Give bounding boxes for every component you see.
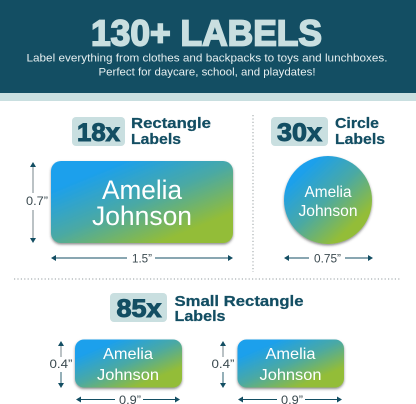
label sample: small rectangle right: Johnson	[260, 367, 322, 384]
subtitle	[26, 52, 388, 78]
label sample: small rectangle left: Amelia	[103, 346, 153, 363]
label sample: circle	[284, 156, 372, 244]
label sample: small rectangle left: Johnson	[97, 367, 159, 384]
height dimension 0.4 left	[50, 341, 72, 388]
width dimension 0.75: 0.75”	[314, 252, 341, 266]
panel: small rectangle labels	[50, 293, 344, 404]
width dimension 0.75	[284, 252, 373, 266]
width dimension 0.9 left	[76, 393, 180, 404]
heading: 30x circle labels: Labels	[335, 131, 385, 148]
width dimension 1.5: 1.5”	[132, 252, 152, 266]
heading: 30x circle labels: Circle	[335, 115, 379, 132]
header banner	[0, 0, 416, 101]
panel: rectangle labels	[26, 115, 233, 266]
label sample: large rectangle: Amelia	[102, 175, 183, 205]
height dimension 0.4 right	[212, 341, 234, 388]
height dimension 0.7: 0.7”	[26, 194, 48, 208]
height dimension 0.4 right: 0.4”	[212, 357, 234, 371]
width dimension 0.9 right	[238, 393, 342, 404]
heading: 85x small rectangle labels: Small Rectangle	[174, 293, 304, 310]
label sample: small rectangle left	[75, 340, 182, 388]
height dimension 0.7	[26, 162, 48, 243]
label sample: large rectangle	[51, 161, 233, 243]
label sample: large rectangle: Johnson	[92, 201, 192, 231]
subtitle: Label everything from clothes and backpacks to toys and lunchboxes.	[26, 52, 388, 64]
title: 130+ LABELS	[91, 12, 322, 54]
heading: 30x circle labels	[271, 115, 385, 148]
heading: 18x rectangle labels: Labels	[131, 131, 181, 148]
label sample: small rectangle right	[238, 340, 344, 388]
heading: 85x small rectangle labels	[110, 293, 304, 325]
heading: 18x rectangle labels	[72, 115, 211, 148]
label sample: small rectangle right: Amelia	[266, 346, 316, 363]
height dimension 0.4 left: 0.4”	[50, 357, 72, 371]
heading: 18x rectangle labels: 18x	[77, 119, 120, 147]
panel: circle labels	[271, 115, 385, 266]
width dimension 1.5	[51, 252, 233, 266]
heading: 18x rectangle labels: Rectangle	[131, 115, 211, 132]
heading: 85x small rectangle labels: 85x	[116, 295, 162, 323]
subtitle: Perfect for daycare, school, and playdates!	[98, 66, 316, 78]
label sample: circle: Amelia	[304, 184, 352, 201]
heading: 30x circle labels: 30x	[277, 119, 322, 147]
heading: 85x small rectangle labels: Labels	[174, 308, 226, 325]
label sample: circle: Johnson	[298, 203, 358, 220]
section dividers	[14, 115, 401, 279]
